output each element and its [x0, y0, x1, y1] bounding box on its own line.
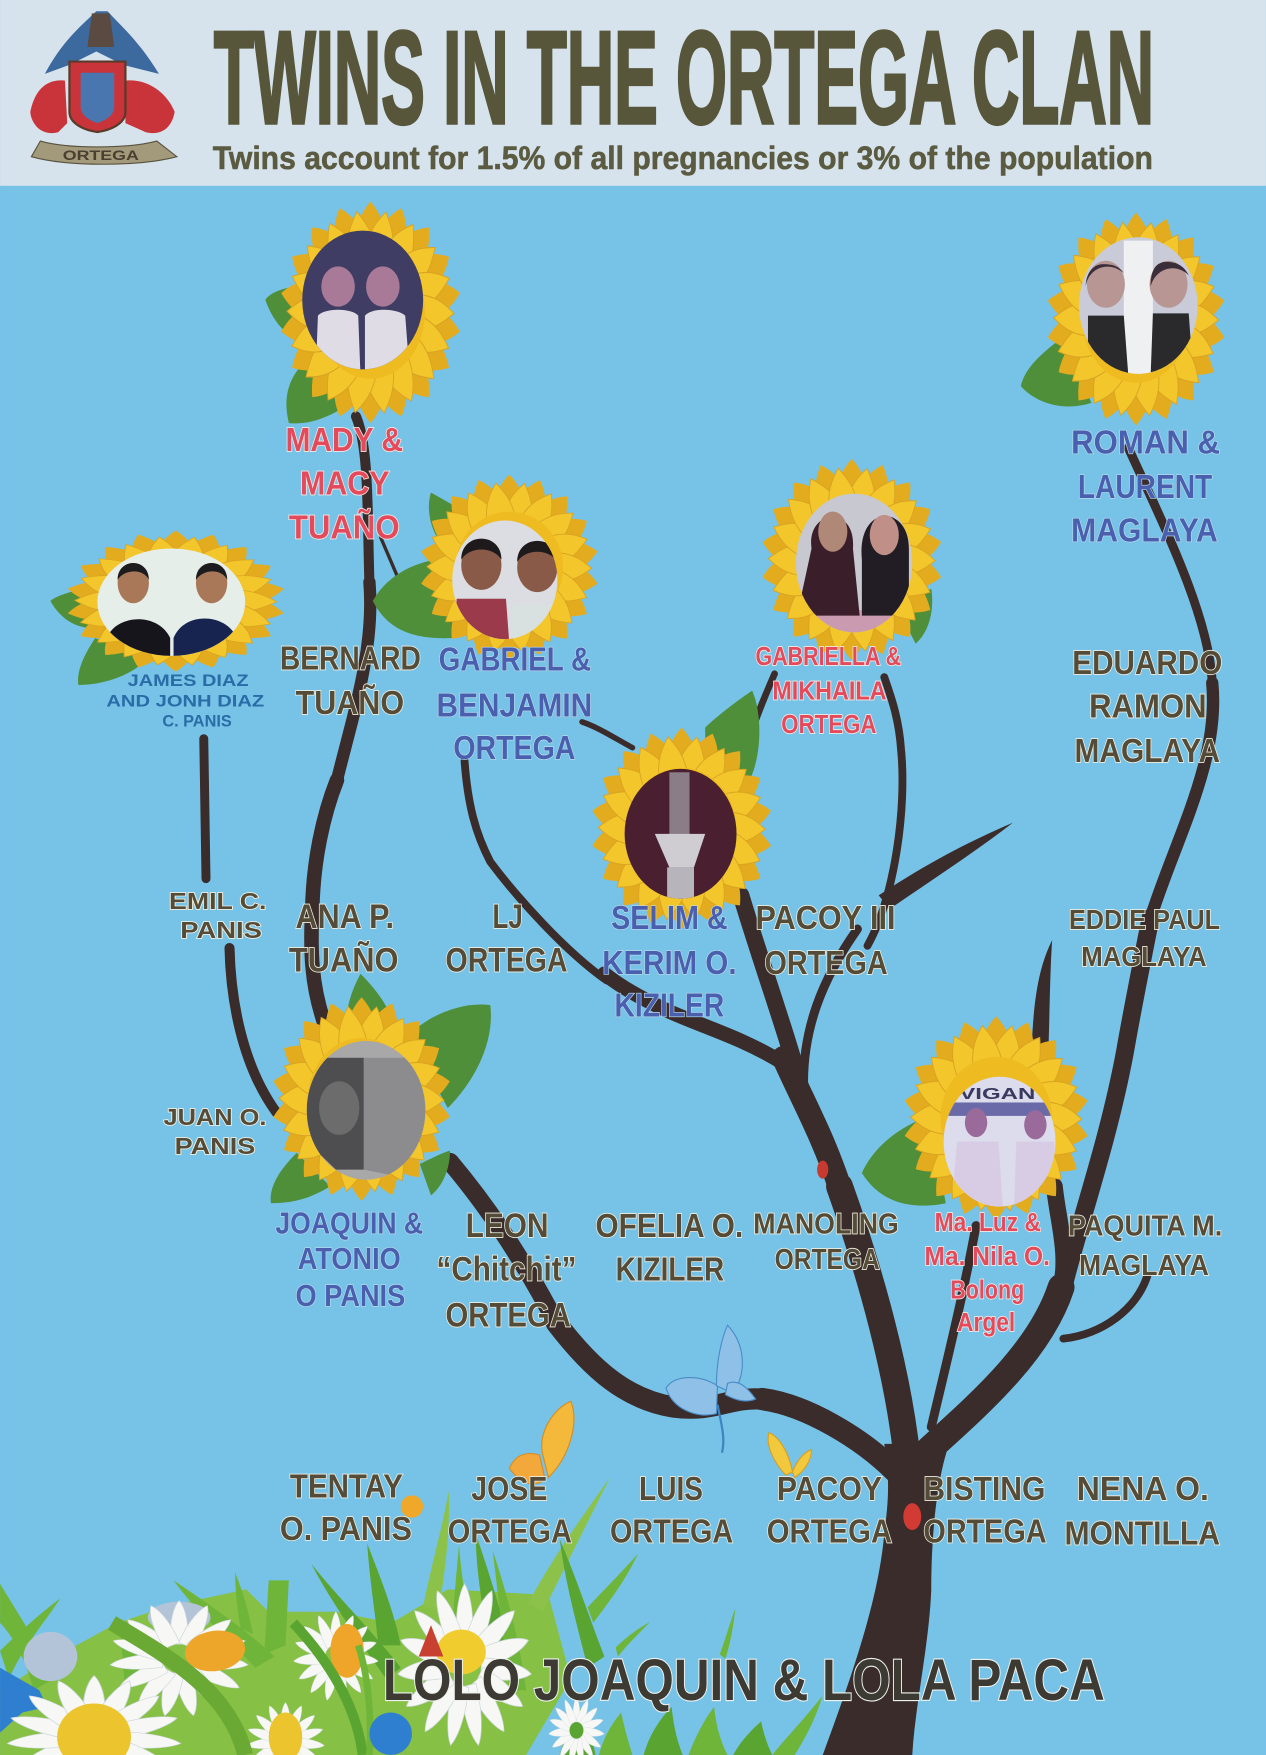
icon: blue flowers: [0, 1668, 47, 1733]
label: Leon Chitchit Ortega: [437, 1207, 576, 1334]
label: James Diaz and Jonh Diaz C. Panis: AND JONH DIAZ: [106, 691, 264, 710]
label: Ana P. Tuaño: [289, 898, 399, 980]
sunflower: Gabriel and Benjamin: [373, 474, 600, 660]
grass blades: [0, 1477, 823, 1755]
label: Joaquin and Atonio O. Panis: O PANIS: [296, 1280, 405, 1313]
label: Bisting Ortega: [923, 1471, 1047, 1550]
label: Eduardo Ramon Maglaya: RAMON: [1089, 688, 1207, 725]
label: Mady and Macy Tuaño: MACY: [300, 466, 390, 503]
label: Eddie Paul Maglaya: MAGLAYA: [1081, 941, 1207, 972]
daisies: [148, 1602, 210, 1633]
label: Eddie Paul Maglaya: EDDIE PAUL: [1069, 904, 1220, 935]
label: Emil C. Panis: [169, 888, 266, 943]
crest motto: ORTEGA: [63, 148, 139, 163]
label: Pacoy Ortega: PACOY: [777, 1471, 882, 1508]
photo: grayscale twin men: [307, 1058, 428, 1175]
label: Bernard Tuaño: [280, 640, 421, 722]
label: Pacoy III Ortega: ORTEGA: [765, 945, 888, 982]
sunflower: Roman and Laurent: [1021, 213, 1227, 425]
photo: twin boys: [453, 539, 560, 644]
label: Bisting Ortega: BISTING: [923, 1471, 1045, 1508]
label: Emil C. Panis: EMIL C.: [169, 888, 266, 914]
label: Ofelia O. Kiziler: [596, 1208, 743, 1288]
icon: orange butterfly: [509, 1401, 574, 1484]
label: LJ Ortega: LJ: [493, 898, 523, 936]
meadow of grass and daisies: [0, 1477, 823, 1755]
label: Pacoy III Ortega: PACOY III: [756, 900, 895, 937]
label: Gabriella and Mikhaila Ortega: ORTEGA: [781, 711, 876, 739]
label: Mady and Macy Tuaño: MADY &: [285, 422, 403, 459]
family tree branches: [204, 416, 1213, 1755]
photo: twin girls: [316, 266, 410, 375]
label: Roman and Laurent Maglaya: [1071, 424, 1220, 550]
icon: yellow butterfly: [768, 1433, 812, 1477]
icon: blue flower: [369, 1712, 412, 1755]
label: Ma. Luz and Ma. Nila O. Bolong Argel: Ma. Luz &: [935, 1209, 1041, 1237]
label: LJ Ortega: [446, 898, 568, 980]
label: Ma. Luz and Ma. Nila O. Bolong Argel: Bolong: [950, 1276, 1024, 1304]
icon: red bud: [419, 1625, 443, 1657]
label: Roman and Laurent Maglaya: ROMAN &: [1071, 424, 1220, 461]
photo: twin babies: [1086, 241, 1193, 375]
label: Gabriella and Mikhaila Ortega: MIKHAILA: [772, 678, 887, 706]
label: Emil C. Panis: PANIS: [180, 917, 262, 943]
label: Leon Chitchit Ortega: ORTEGA: [446, 1296, 571, 1334]
label: Manoling Ortega: ORTEGA: [775, 1244, 880, 1276]
label: Eduardo Ramon Maglaya: [1072, 645, 1222, 770]
label: Roman and Laurent Maglaya: MAGLAYA: [1071, 513, 1218, 550]
label: Ma. Luz and Ma. Nila O. Bolong Argel: Argel: [957, 1309, 1015, 1337]
label: Paquita M. Maglaya: PAQUITA M.: [1068, 1211, 1222, 1243]
label: Juan O. Panis: [163, 1104, 266, 1159]
sunflower: Joaquin and Atonio: [271, 974, 491, 1203]
sunflower: Mady and Macy: [265, 201, 463, 423]
label: Bernard Tuaño: TUAÑO: [296, 684, 404, 722]
photo: baptism scene: [655, 772, 705, 901]
photo: twin women at Vigan sign: VIGAN: [959, 1086, 1035, 1103]
label: Ana P. Tuaño: TUAÑO: [289, 941, 399, 980]
label: Eduardo Ramon Maglaya: MAGLAYA: [1075, 733, 1220, 770]
dark curved blades: [112, 1623, 245, 1755]
sunflower: Gabriella and Mikhaila: [760, 459, 944, 660]
label: Selim and Kerim O. Kiziler: KIZILER: [615, 987, 724, 1024]
photo: twin women: [802, 512, 909, 632]
label: Gabriella and Mikhaila Ortega: [756, 643, 901, 739]
label: Eddie Paul Maglaya: [1069, 904, 1220, 972]
label: Gabriel and Benjamin Ortega: BENJAMIN: [437, 687, 592, 724]
label: Ofelia O. Kiziler: OFELIA O.: [596, 1208, 743, 1245]
label: Leon Chitchit Ortega: “Chitchit”: [437, 1250, 576, 1288]
label: Lolo Joaquin and Lola Paca: LOLO JOAQUIN & LOLA PACA: [383, 1648, 1105, 1713]
label: Manoling Ortega: [753, 1208, 899, 1276]
label: Jose Ortega: ORTEGA: [448, 1513, 572, 1550]
label: Nena O. Montilla: NENA O.: [1077, 1471, 1209, 1508]
label: Joaquin and Atonio O. Panis: JOAQUIN &: [275, 1207, 423, 1240]
photo: twin men: [110, 563, 233, 656]
label: Gabriel and Benjamin Ortega: GABRIEL &: [439, 641, 591, 678]
label: Pacoy III Ortega: [756, 900, 895, 982]
label: LJ Ortega: ORTEGA: [446, 942, 568, 980]
label: Juan O. Panis: PANIS: [175, 1133, 255, 1159]
label: Luis Ortega: [610, 1471, 733, 1550]
label: Juan O. Panis: JUAN O.: [163, 1104, 266, 1130]
subtitle: Twins account for 1.5% of all pregnancies or 3% of the population: [213, 140, 1153, 176]
label: Selim and Kerim O. Kiziler: KERIM O.: [602, 945, 737, 982]
label: Ofelia O. Kiziler: KIZILER: [616, 1251, 724, 1288]
sunflower: Ma. Luz and Ma. Nila: [862, 1016, 1091, 1220]
label: Gabriel and Benjamin Ortega: ORTEGA: [453, 730, 575, 767]
label: Gabriella and Mikhaila Ortega: GABRIELLA &: [756, 643, 901, 671]
icon: Ortega family crest: [30, 11, 177, 164]
label: Ana P. Tuaño: ANA P.: [296, 898, 394, 936]
label: Joaquin and Atonio O. Panis: ATONIO: [298, 1243, 401, 1276]
label: Nena O. Montilla: [1064, 1471, 1220, 1553]
label: Mady and Macy Tuaño: [285, 422, 403, 546]
icon: orange bud: [401, 1495, 423, 1518]
label: James Diaz and Jonh Diaz C. Panis: JAMES DIAZ: [128, 671, 249, 690]
label: Selim and Kerim O. Kiziler: SELIM &: [611, 900, 728, 937]
icon: ladybug upper: [817, 1161, 828, 1179]
sunflower: Selim and Kerim: [590, 691, 774, 929]
label: Bernard Tuaño: BERNARD: [280, 640, 421, 677]
label: Gabriel and Benjamin Ortega: [437, 641, 592, 767]
photo: twin women at Vigan sign: [944, 1086, 1057, 1207]
label: Selim and Kerim O. Kiziler: [602, 900, 737, 1024]
label: Nena O. Montilla: MONTILLA: [1064, 1516, 1220, 1553]
header band: [0, 0, 1266, 186]
icon: ladybug lower: [903, 1503, 921, 1530]
label: Roman and Laurent Maglaya: LAURENT: [1078, 469, 1213, 506]
label: Tentay O. Panis: [280, 1469, 412, 1548]
label: James Diaz and Jonh Diaz C. Panis: [106, 671, 264, 730]
label: Pacoy Ortega: [767, 1471, 892, 1550]
label: Tentay O. Panis: TENTAY: [290, 1469, 403, 1506]
sunflower: James and Jonh: [50, 530, 287, 685]
label: Jose Ortega: [448, 1471, 572, 1550]
label: Manoling Ortega: MANOLING: [753, 1208, 899, 1240]
label: Bisting Ortega: ORTEGA: [923, 1513, 1047, 1550]
label: Eduardo Ramon Maglaya: EDUARDO: [1072, 645, 1222, 682]
label: Leon Chitchit Ortega: LEON: [466, 1207, 548, 1245]
icon: blue butterfly: [666, 1325, 756, 1453]
label: Pacoy Ortega: ORTEGA: [767, 1513, 892, 1550]
label: Luis Ortega: LUIS: [639, 1471, 703, 1508]
label: Joaquin and Atonio O. Panis: [275, 1207, 423, 1313]
label: Jose Ortega: JOSE: [471, 1471, 547, 1508]
green base: [0, 1589, 571, 1755]
label: Tentay O. Panis: O. PANIS: [280, 1511, 412, 1548]
label: Paquita M. Maglaya: MAGLAYA: [1079, 1250, 1209, 1282]
label: Ma. Luz and Ma. Nila O. Bolong Argel: Ma. Nila O.: [925, 1243, 1050, 1271]
label: Ma. Luz and Ma. Nila O. Bolong Argel: [925, 1209, 1050, 1337]
label: Mady and Macy Tuaño: TUAÑO: [289, 508, 400, 546]
label: Paquita M. Maglaya: [1068, 1211, 1222, 1282]
label: James Diaz and Jonh Diaz C. Panis: C. PANIS: [162, 711, 232, 730]
label: Luis Ortega: ORTEGA: [610, 1513, 733, 1550]
